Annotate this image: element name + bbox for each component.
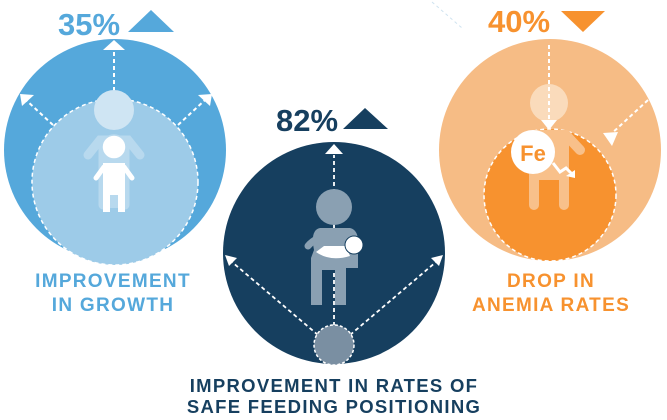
- heading: 82%: [276, 103, 388, 138]
- heading: 40%: [488, 4, 605, 39]
- label: improvement in growth: IMPROVEMENT: [35, 271, 191, 292]
- panel: growth: [4, 7, 226, 316]
- icon: growing child: [88, 90, 140, 212]
- icon: Fe iron drop: Fe: [520, 141, 546, 166]
- heading: 82%: 82%: [276, 103, 338, 138]
- icon: mother feeding baby: [308, 189, 363, 305]
- label: safe feeding: IMPROVEMENT IN RATES OF: [190, 375, 478, 396]
- arrows: feeding: [232, 155, 436, 335]
- heading: 35%: 35%: [58, 7, 120, 42]
- icon: child figure: [530, 84, 580, 205]
- icon: Fe iron drop: [511, 130, 575, 178]
- small grey dashed circle: [314, 325, 354, 365]
- arrows: growth: [26, 50, 205, 125]
- arrows: anemia: [549, 45, 648, 135]
- label: drop in anemia rates: DROP IN: [507, 271, 595, 292]
- outer circle blue: [4, 39, 226, 261]
- inner dashed circle: [32, 99, 198, 265]
- panel: growth: IN GROWTH: [52, 295, 174, 316]
- panel: safe feeding: [187, 103, 481, 417]
- outer circle light orange: [439, 39, 661, 261]
- inner dark orange dashed circle: [484, 129, 616, 261]
- outer circle navy: [223, 142, 445, 364]
- heading: 35%: [58, 7, 174, 42]
- panel: safe feeding: SAFE FEEDING POSITIONING: [187, 396, 481, 417]
- panel: anemia: ANEMIA RATES: [472, 295, 630, 316]
- panel: anemia: [439, 4, 661, 316]
- decorative dashed line top right: [432, 2, 462, 28]
- heading: 40%: 40%: [488, 4, 550, 39]
